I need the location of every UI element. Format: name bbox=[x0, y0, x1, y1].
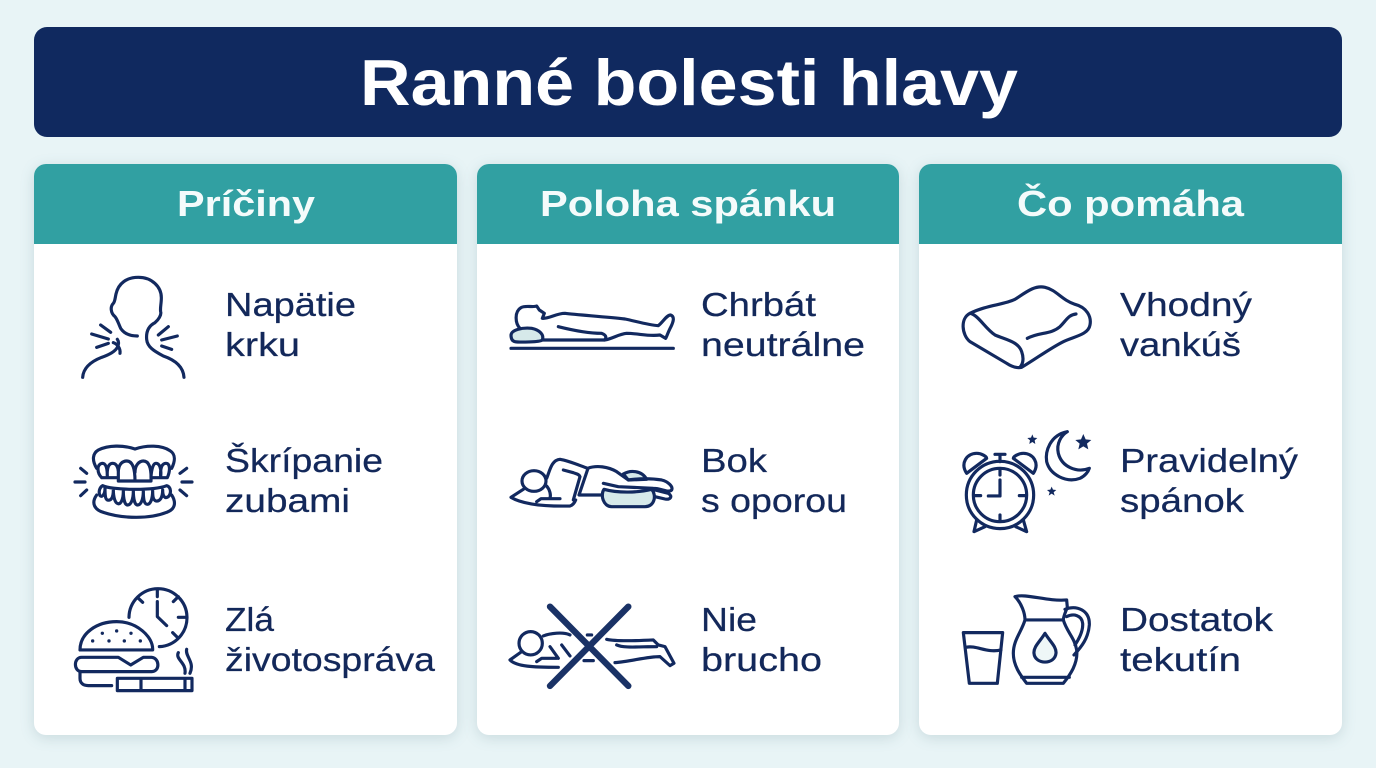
text: nie brucho: brucho bbox=[701, 641, 822, 678]
text: škrípanie zubami bbox=[225, 442, 383, 519]
text: nie brucho bbox=[701, 601, 822, 678]
text: chrbát neutrálne bbox=[701, 286, 865, 363]
text: chrbát neutrálne: neutrálne bbox=[701, 326, 865, 363]
icon: side sleeping bbox=[511, 459, 672, 507]
icon: alarm clock and moon bbox=[964, 432, 1091, 532]
text: vhodný vankúš: vankúš bbox=[1120, 326, 1241, 363]
icon: poor lifestyle bbox=[75, 589, 192, 691]
text: zlá životospráva bbox=[225, 601, 436, 678]
title banner bbox=[34, 27, 1342, 137]
text: vhodný vankúš bbox=[1120, 286, 1253, 363]
heading: príčiny: Príčiny bbox=[177, 183, 315, 224]
text: pravidelný spánok: spánok bbox=[1120, 482, 1245, 519]
title: Ranné bolesti hlavy bbox=[360, 46, 1018, 119]
icon: back sleeping bbox=[511, 306, 673, 348]
text: napätie krku: Napätie bbox=[225, 286, 356, 323]
text: nie brucho: Nie bbox=[701, 601, 757, 638]
heading: čo pomáha: Čo pomáha bbox=[1017, 182, 1245, 224]
heading: poloha spánku: Poloha spánku bbox=[540, 183, 836, 224]
panel: poloha spánku bbox=[477, 164, 899, 735]
icon: neck pain bbox=[83, 277, 184, 377]
text: pravidelný spánok: Pravidelný bbox=[1120, 442, 1299, 479]
icon: jug and glass bbox=[963, 596, 1089, 683]
text: bok s oporou: Bok bbox=[701, 442, 768, 479]
text: chrbát neutrálne: Chrbát bbox=[701, 286, 816, 323]
text: napätie krku: krku bbox=[225, 326, 300, 363]
text: napätie krku bbox=[225, 286, 356, 363]
panel: príčiny bbox=[34, 164, 457, 735]
text: vhodný vankúš: Vhodný bbox=[1120, 286, 1253, 323]
icon: grinding teeth bbox=[75, 446, 192, 517]
text: pravidelný spánok bbox=[1120, 442, 1299, 519]
icon: stomach sleeping crossed out bbox=[510, 607, 674, 686]
text: dostatok tekutín: Dostatok bbox=[1120, 601, 1274, 638]
text: zlá životospráva: Zlá bbox=[225, 601, 275, 638]
text: škrípanie zubami: zubami bbox=[225, 482, 350, 519]
panel: čo pomáha bbox=[919, 164, 1342, 735]
text: dostatok tekutín: tekutín bbox=[1120, 641, 1241, 678]
text: bok s oporou bbox=[701, 442, 847, 519]
text: bok s oporou: s oporou bbox=[701, 482, 847, 519]
text: dostatok tekutín bbox=[1120, 601, 1274, 678]
text: zlá životospráva: životospráva bbox=[225, 641, 436, 678]
text: škrípanie zubami: Škrípanie bbox=[225, 442, 383, 479]
icon: pillow bbox=[963, 287, 1090, 368]
